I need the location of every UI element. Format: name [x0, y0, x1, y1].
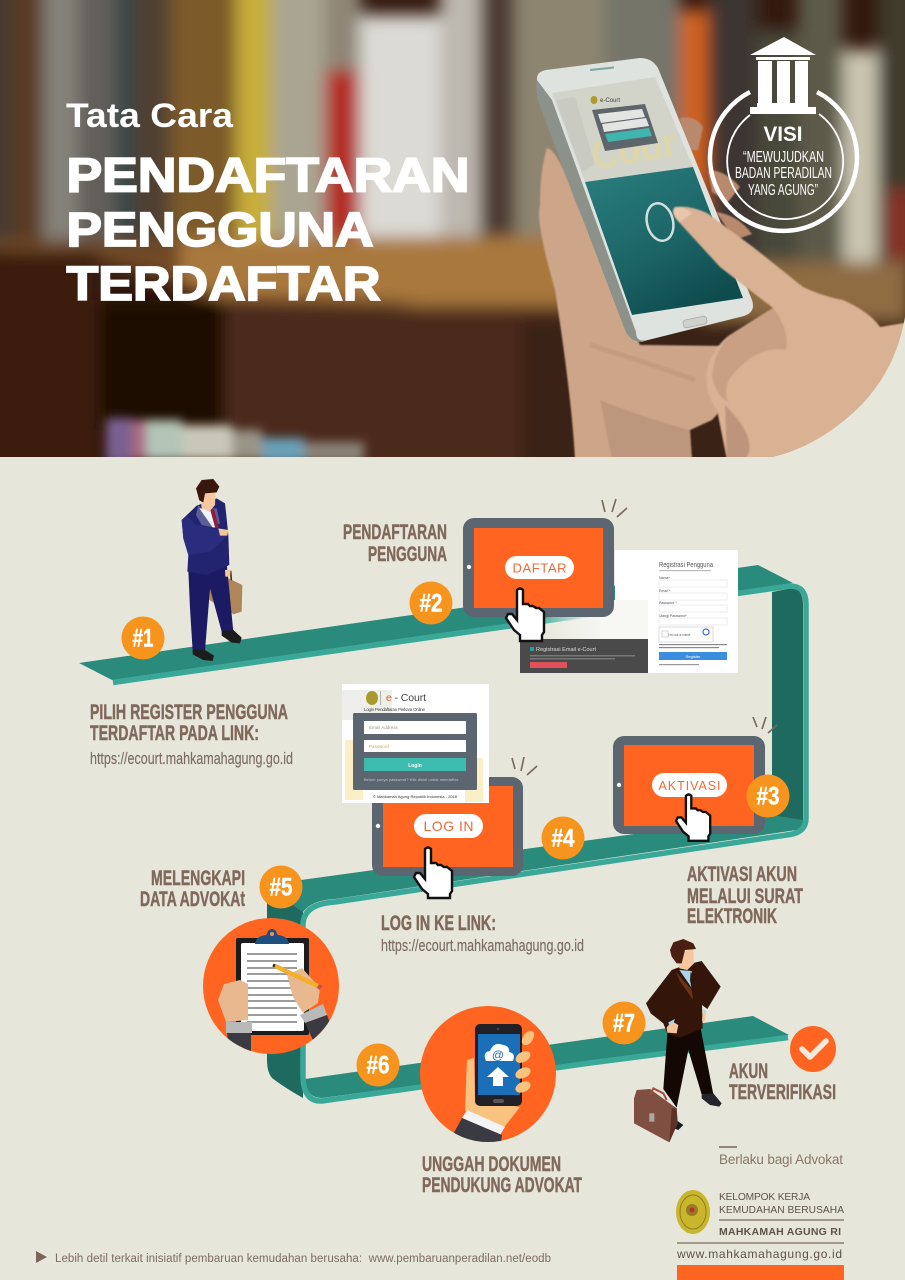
registration screenshot: Registrasi Email e-Court: [536, 647, 596, 653]
clip: [255, 929, 289, 944]
badge 3: [746, 774, 790, 818]
shoes: [702, 1093, 722, 1107]
right hand: [287, 968, 320, 1013]
registration screenshot: Register: [686, 654, 701, 659]
trousers: [188, 563, 233, 651]
ribbon face 3 with end tip: [305, 1016, 789, 1098]
label step 6: PENDUKUNG ADVOKAT: [422, 1174, 582, 1197]
hand on bag: [225, 569, 231, 577]
badge 5: #5: [270, 874, 293, 902]
icon: phone upload in orange circle: [420, 1006, 556, 1150]
tablet: aktivasi: AKTIVASI: [658, 779, 720, 793]
cursor hand: [676, 794, 710, 841]
trousers: [663, 1025, 713, 1108]
hair: [196, 479, 219, 502]
pathway ribbon: [79, 565, 806, 1101]
registration screenshot: Ulangi Password*: [659, 614, 687, 618]
login screenshot: Belum punya password? Klik disini untuk mendaftar.: [364, 778, 459, 782]
smartphone: e-Court: [600, 98, 620, 104]
login screenshot: Login: [408, 763, 422, 769]
left hand: [218, 980, 248, 1022]
label step 6: UNGGAH DOKUMEN: [422, 1153, 561, 1176]
curved cream corner of photo: [773, 317, 905, 457]
emblem: VISI with temple icon: BADAN PERADILAN: [735, 165, 832, 182]
logo block: Mahkamah Agung: www.mahkamahagung.go.id: [676, 1247, 842, 1261]
ribbon face 1: [79, 565, 793, 680]
badge 5: [260, 866, 302, 908]
subtitle: Tata Cara: Tata Cara: [66, 97, 234, 135]
label step 3: AKTIVASI AKUN: [687, 863, 797, 886]
icon: orange check mark: [790, 1026, 836, 1072]
step badges: [122, 582, 790, 1086]
emblem: VISI with temple icon: YANG AGUNG”: [748, 182, 818, 199]
jacket: [182, 498, 229, 575]
footer note: Lebih detil terkait inisiatif pembaruan kemudahan berusaha: www.pembaruanperadilan.net/eodb: [55, 1253, 551, 1265]
briefcase: [634, 1089, 678, 1142]
device frame: [613, 736, 765, 834]
arrow: [487, 1067, 509, 1086]
note: berlaku bagi advokat: Berlaku bagi Advokat: [719, 1152, 843, 1167]
badge 6: #6: [366, 1052, 390, 1080]
label step 5: [140, 867, 245, 911]
label step 3: MELALUI SURAT: [687, 885, 803, 908]
tie: [690, 972, 696, 998]
cloud: [485, 1044, 514, 1061]
person 1: businessman checking watch: [182, 479, 242, 661]
tablet: log in: [342, 684, 537, 898]
label step 3: [687, 863, 803, 928]
orange footer bar: [677, 1265, 844, 1280]
hand: [465, 1058, 520, 1130]
device frame: [372, 777, 523, 876]
briefcase: [209, 577, 242, 614]
hair: [670, 939, 696, 963]
right hand with index finger: [673, 207, 905, 460]
label step 2: [343, 521, 447, 566]
shirt: [199, 508, 218, 527]
registration screenshot: Password *: [659, 601, 677, 605]
clipboard: [236, 938, 309, 1035]
login screenshot: [342, 684, 489, 803]
label step 7: [729, 1060, 836, 1104]
face: [677, 948, 694, 970]
registration screenshot: Registrasi Pengguna: [659, 560, 714, 569]
label step 1: https://ecourt.mahkamahagung.go.id: [90, 749, 293, 768]
badge 7: [602, 1002, 646, 1044]
left bend dark panel: [267, 882, 303, 1098]
device frame: [463, 518, 614, 617]
login screenshot: e - Court: [386, 692, 426, 704]
heading line 1: PENDAFTARAN: [66, 150, 470, 202]
fingers behind phone: [680, 117, 752, 240]
registration screenshot: Nama*: [659, 576, 670, 580]
heading line 2: PENGGUNA: [66, 204, 374, 257]
badge 2: #2: [420, 590, 442, 618]
badge 3: #3: [756, 782, 780, 810]
smartphone: -Cour: [576, 121, 680, 181]
registration screenshot: I'm not a robot: [668, 633, 690, 637]
badge 4: [542, 816, 584, 860]
login screenshot: © Mahkamah Agung Republik Indonesia - 2018: [373, 794, 458, 799]
smartphone: [536, 58, 753, 342]
title: [66, 97, 470, 311]
label step 2: PENDAFTARAN: [343, 521, 447, 544]
emblem: VISI with temple icon: VISI: [764, 123, 802, 146]
label step 2: PENGGUNA: [368, 543, 447, 566]
ticks: [602, 499, 627, 517]
label step 4: LOG IN KE LINK:: [381, 912, 496, 935]
label step 7: TERVERIFIKASI: [729, 1081, 836, 1104]
cursor hand: [414, 848, 452, 898]
icon: clipboard and hands in orange circle: [203, 918, 339, 1054]
left hand palm: [539, 148, 730, 460]
tie: [210, 509, 219, 528]
tablet: daftar: DAFTAR: [512, 560, 566, 576]
registration screenshot: [520, 550, 738, 673]
fingers: [515, 1030, 534, 1093]
logo block: Mahkamah Agung: KEMUDAHAN BERUSAHA: [719, 1205, 844, 1216]
icon: seal: [676, 1190, 710, 1234]
shirt: [679, 970, 694, 991]
person 7: businessman hands on hips: [634, 939, 722, 1142]
button: [414, 814, 483, 838]
logo block: Mahkamah Agung: MAHKAMAH AGUNG RI: [719, 1226, 841, 1238]
emblem: VISI with temple icon: “MEWUJUDKAN: [743, 149, 824, 166]
label step 3: ELEKTRONIK: [687, 905, 777, 928]
label step 5: MELENGKAPI: [151, 867, 245, 890]
tablet: daftar: [463, 499, 738, 673]
hand: [218, 528, 228, 536]
label step 5: DATA ADVOKAt: [140, 888, 245, 911]
label step 1: TERDAFTAR PADA LINK:: [90, 722, 259, 745]
registration screenshot: Email *: [659, 589, 671, 593]
cursor hand: [506, 588, 544, 641]
emblem: VISI with temple icon: [710, 37, 857, 231]
right bend dark panel: [772, 588, 803, 826]
ticks: [512, 757, 537, 775]
badge 2: [410, 582, 452, 624]
badge 7: #7: [613, 1010, 635, 1038]
label step 7: AKUN: [729, 1060, 768, 1083]
button: [505, 556, 574, 579]
label step 6: [422, 1153, 582, 1197]
hands: [667, 1021, 678, 1033]
sleeve: [182, 517, 227, 555]
tablet: aktivasi: [613, 717, 777, 841]
face: [200, 491, 216, 512]
light edge strip: [113, 586, 806, 1101]
cuff: [462, 1110, 505, 1135]
heading line 3: TERDAFTAR: [66, 258, 380, 311]
badge 1: #1: [132, 624, 154, 652]
jacket: [646, 961, 721, 1038]
badge 6: [356, 1044, 400, 1086]
icon: phone upload in orange circle: @: [492, 1048, 504, 1062]
icon: temple: [750, 37, 816, 114]
label step 4: https://ecourt.mahkamahagung.go.id: [381, 936, 584, 955]
hero photo: bookshelf and hand holding phone: [0, 0, 905, 472]
logo block: Mahkamah Agung: [676, 1190, 844, 1280]
phone: [475, 1024, 522, 1106]
label step 1: [90, 701, 293, 768]
lapel: [676, 972, 693, 1000]
pencil: [275, 966, 318, 986]
label step 4: [381, 912, 584, 955]
logo block: Mahkamah Agung: KELOMPOK KERJA: [719, 1192, 810, 1203]
ticks: [753, 717, 777, 733]
login screenshot: Email Address: [369, 725, 399, 730]
label step 1: PILIH REGISTER PENGGUNA: [90, 701, 288, 724]
login screenshot: Password: [369, 744, 389, 749]
shoes: [193, 650, 214, 661]
button: [652, 773, 727, 797]
badge 1: [122, 616, 164, 660]
tablet: log in: LOG IN: [424, 818, 474, 834]
ribbon face 2: [272, 815, 803, 912]
lapels: [196, 505, 217, 528]
login screenshot: Login Pendaftaran Perkara Online: [364, 707, 425, 712]
badge 4: #4: [552, 824, 575, 852]
